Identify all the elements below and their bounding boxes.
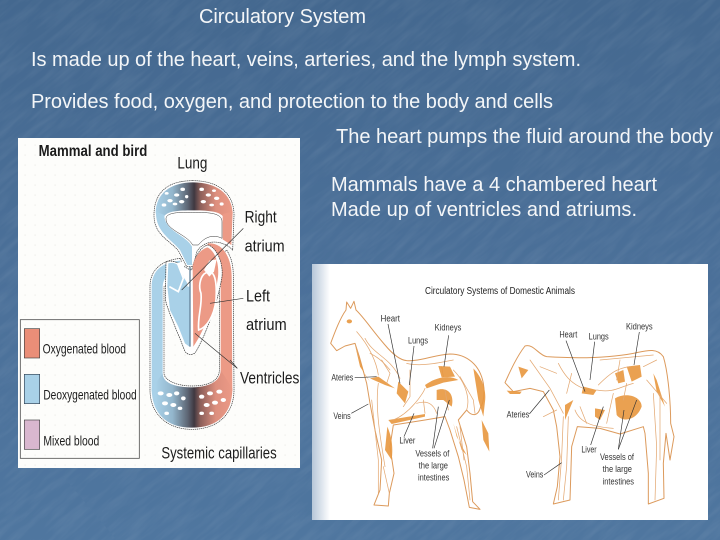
text block: mammal heart chambers: Made up of ventricles and atriums. <box>331 199 637 221</box>
horse labels: Kidneys <box>435 322 462 332</box>
cow labels: Ateries <box>507 409 530 419</box>
horse labels: the large <box>419 460 448 470</box>
horse leader lines <box>351 324 449 448</box>
label: right atrium: atrium <box>245 236 285 255</box>
panel heading: Circulatory Systems of Domestic Animals <box>425 286 575 297</box>
horse body and vessels <box>331 301 489 509</box>
horse labels: Vessels of <box>415 448 450 458</box>
legend item: mixed blood: Mixed blood <box>43 432 99 448</box>
label: left atrium: atrium <box>246 315 287 334</box>
horse labels: Heart <box>381 313 400 323</box>
pulmonary vessels <box>156 212 192 265</box>
deoxygenated vena cava <box>152 261 181 392</box>
leader lines <box>182 228 243 368</box>
diagram: pulmonary and systemic circulation <box>150 181 243 429</box>
label: systemic capillaries: Systemic capillaries <box>161 443 277 462</box>
lung capillary bed <box>156 182 233 216</box>
cow labels: Lungs <box>589 331 609 341</box>
cow labels: intestines <box>603 477 634 487</box>
text block: composition of the system: Is made up of the heart, veins, arteries, and the lymph system. <box>31 49 581 71</box>
illustration: horse <box>331 301 489 509</box>
cow labels: Kidneys <box>626 321 653 331</box>
cow labels <box>507 321 653 487</box>
text block: function of the system: Provides food, oxygen, and protection to the body and cells <box>31 91 553 113</box>
heart right side: oxygenated chambers <box>193 247 218 347</box>
cow labels: Liver <box>581 445 597 455</box>
cow labels: Vessels of <box>600 452 634 462</box>
horse labels <box>331 313 462 482</box>
horse labels: Lungs <box>408 335 428 345</box>
horse labels: Liver <box>399 436 415 446</box>
diagram heading: Mammal and bird <box>39 143 147 160</box>
text block: heart pumps fluid: The heart pumps the fluid around the body <box>336 126 713 148</box>
panel: mammal and bird heart diagram <box>18 138 300 468</box>
capillary bed <box>152 370 232 428</box>
legend <box>20 320 139 458</box>
legend item: deoxygenated blood: Deoxygenated blood <box>43 386 137 402</box>
label: left atrium: Left <box>246 286 270 305</box>
cow labels: Veins <box>526 469 544 479</box>
text block: mammal heart chambers <box>331 174 657 221</box>
cow labels: Heart <box>559 329 578 339</box>
text block: mammal heart chambers: Mammals have a 4 chambered heart <box>331 174 657 196</box>
label: right atrium: Right <box>245 208 277 227</box>
oxygenated aorta <box>205 243 232 392</box>
legend item: oxygenated blood: Oxygenated blood <box>43 340 126 356</box>
title: Circulatory System <box>199 6 366 28</box>
systemic vessels outline <box>150 250 234 429</box>
cow leader lines <box>529 332 639 475</box>
label: right atrium <box>245 208 285 255</box>
label: ventricles: Ventricles <box>240 368 299 387</box>
label: lung: Lung <box>177 154 207 173</box>
heart outline <box>165 245 222 355</box>
cow body and vessels <box>505 346 674 504</box>
label: left atrium <box>246 286 287 334</box>
cow labels: the large <box>603 464 632 474</box>
horse labels: intestines <box>418 472 450 482</box>
illustration: cow <box>505 321 674 504</box>
horse labels: Veins <box>333 411 351 421</box>
panel: circulatory systems of domestic animals <box>312 264 708 520</box>
heart left side: deoxygenated chambers <box>167 263 189 347</box>
horse labels: Ateries <box>331 372 354 382</box>
